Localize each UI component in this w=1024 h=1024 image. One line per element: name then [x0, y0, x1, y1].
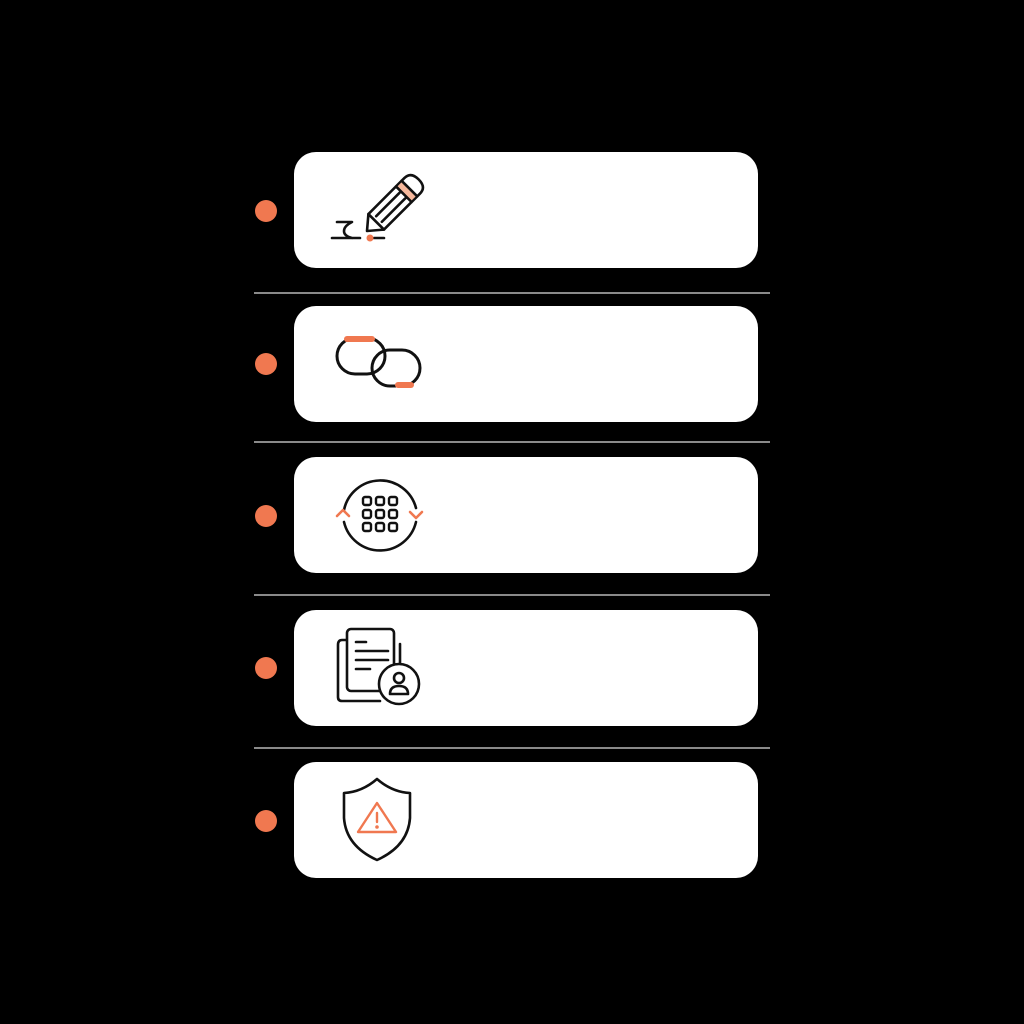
card 3 — [294, 457, 758, 573]
panel: step 3 — [255, 457, 758, 573]
dot 2 — [255, 353, 277, 375]
card 5 — [294, 762, 758, 878]
dot 4 — [255, 657, 277, 679]
panel: step 2 — [255, 306, 758, 422]
panel: step 1 — [255, 152, 758, 268]
icon: shield warning — [344, 779, 410, 860]
icon: pencil — [332, 172, 426, 239]
icon: document with user — [338, 629, 419, 704]
panel: step 4 — [255, 610, 758, 726]
dot 1 — [255, 200, 277, 222]
card 2 — [294, 306, 758, 422]
dot 5 — [255, 810, 277, 832]
dot 3 — [255, 505, 277, 527]
card 4 — [294, 610, 758, 726]
icon: grid cycle — [337, 480, 422, 550]
panel: step 5 — [255, 762, 758, 878]
card 1 — [294, 152, 758, 268]
icon: chain links — [337, 338, 420, 386]
